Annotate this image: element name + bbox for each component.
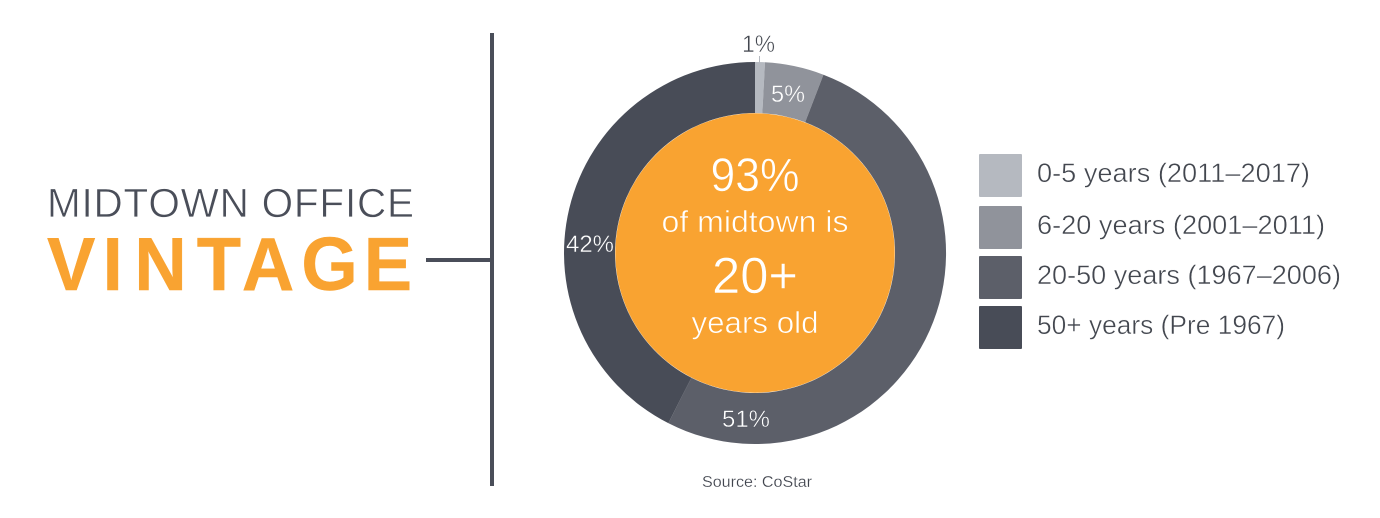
legend item: 50+ years bbox=[979, 306, 1285, 349]
data labels bbox=[566, 31, 805, 433]
caption: years old: years old bbox=[692, 305, 818, 340]
leader line: 1% bbox=[759, 56, 760, 63]
connector bracket bbox=[426, 33, 494, 486]
center circle bbox=[615, 113, 895, 393]
legend bbox=[979, 154, 1341, 349]
label: 51%: 51% bbox=[722, 406, 770, 433]
segment: 51% bbox=[668, 75, 946, 444]
center text bbox=[662, 148, 848, 340]
legend item: 20-50 years: 20-50 years (1967–2006) bbox=[1037, 260, 1341, 290]
label: 42%: 42% bbox=[566, 231, 614, 258]
legend item: 50+ years: 50+ years (Pre 1967) bbox=[1037, 310, 1285, 340]
donut chart bbox=[564, 31, 946, 444]
caption: of midtown is: of midtown is bbox=[662, 204, 848, 239]
heading: vintage: VINTAGE bbox=[47, 222, 412, 306]
stat: 20+: 20+ bbox=[712, 247, 798, 304]
source note: Source: CoStar bbox=[702, 474, 812, 491]
legend item: 20-50 years bbox=[979, 256, 1341, 299]
label: 1%: 1% bbox=[742, 31, 775, 58]
legend item: 0-5 years: 0-5 years (2011–2017) bbox=[1037, 158, 1310, 188]
stat: 93%: 93% bbox=[710, 148, 800, 201]
segment: 5% bbox=[762, 62, 823, 122]
heading: midtown office: MIDTOWN OFFICE bbox=[47, 180, 414, 226]
legend item: 6-20 years: 6-20 years (2001–2011) bbox=[1037, 210, 1325, 240]
legend item: 6-20 years bbox=[979, 206, 1325, 249]
title block bbox=[47, 180, 414, 306]
segment: 1% bbox=[755, 62, 765, 113]
legend item: 0-5 years bbox=[979, 154, 1310, 197]
label: 5%: 5% bbox=[771, 81, 805, 108]
segment: 42% bbox=[564, 62, 755, 423]
